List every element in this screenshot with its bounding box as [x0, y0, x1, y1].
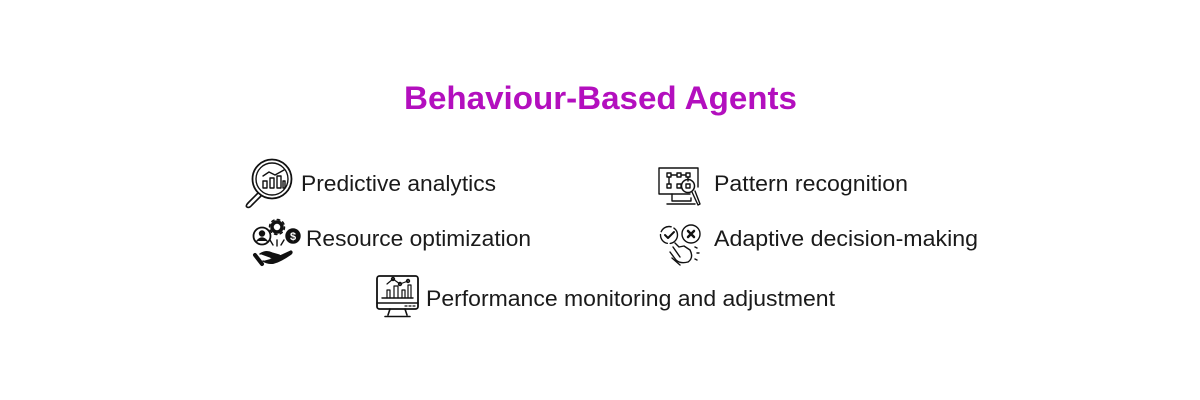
- title: Behaviour-Based Agents: [404, 80, 797, 116]
- item: pattern recognition: [659, 168, 908, 205]
- icon: monitor with bar chart: [377, 276, 418, 316]
- icon: hand with gear, person and dollar: $: [290, 231, 296, 243]
- item: performance monitoring and adjustment: [377, 276, 835, 316]
- item: adaptive decision-making: [660, 225, 978, 265]
- icon: monitor with magnifier: [659, 168, 700, 205]
- label: Adaptive decision-making: [714, 226, 978, 251]
- label: Resource optimization: [306, 226, 531, 251]
- item: predictive analytics: [246, 160, 496, 207]
- label: Pattern recognition: [714, 171, 908, 196]
- icon: magnifier over chart: [246, 160, 292, 207]
- icon: hand with gear, person and dollar: [254, 220, 300, 264]
- item: resource optimization: [254, 220, 531, 264]
- icon: hand choosing check or cross: [660, 225, 700, 265]
- label: Predictive analytics: [301, 171, 496, 196]
- label: Performance monitoring and adjustment: [426, 286, 835, 311]
